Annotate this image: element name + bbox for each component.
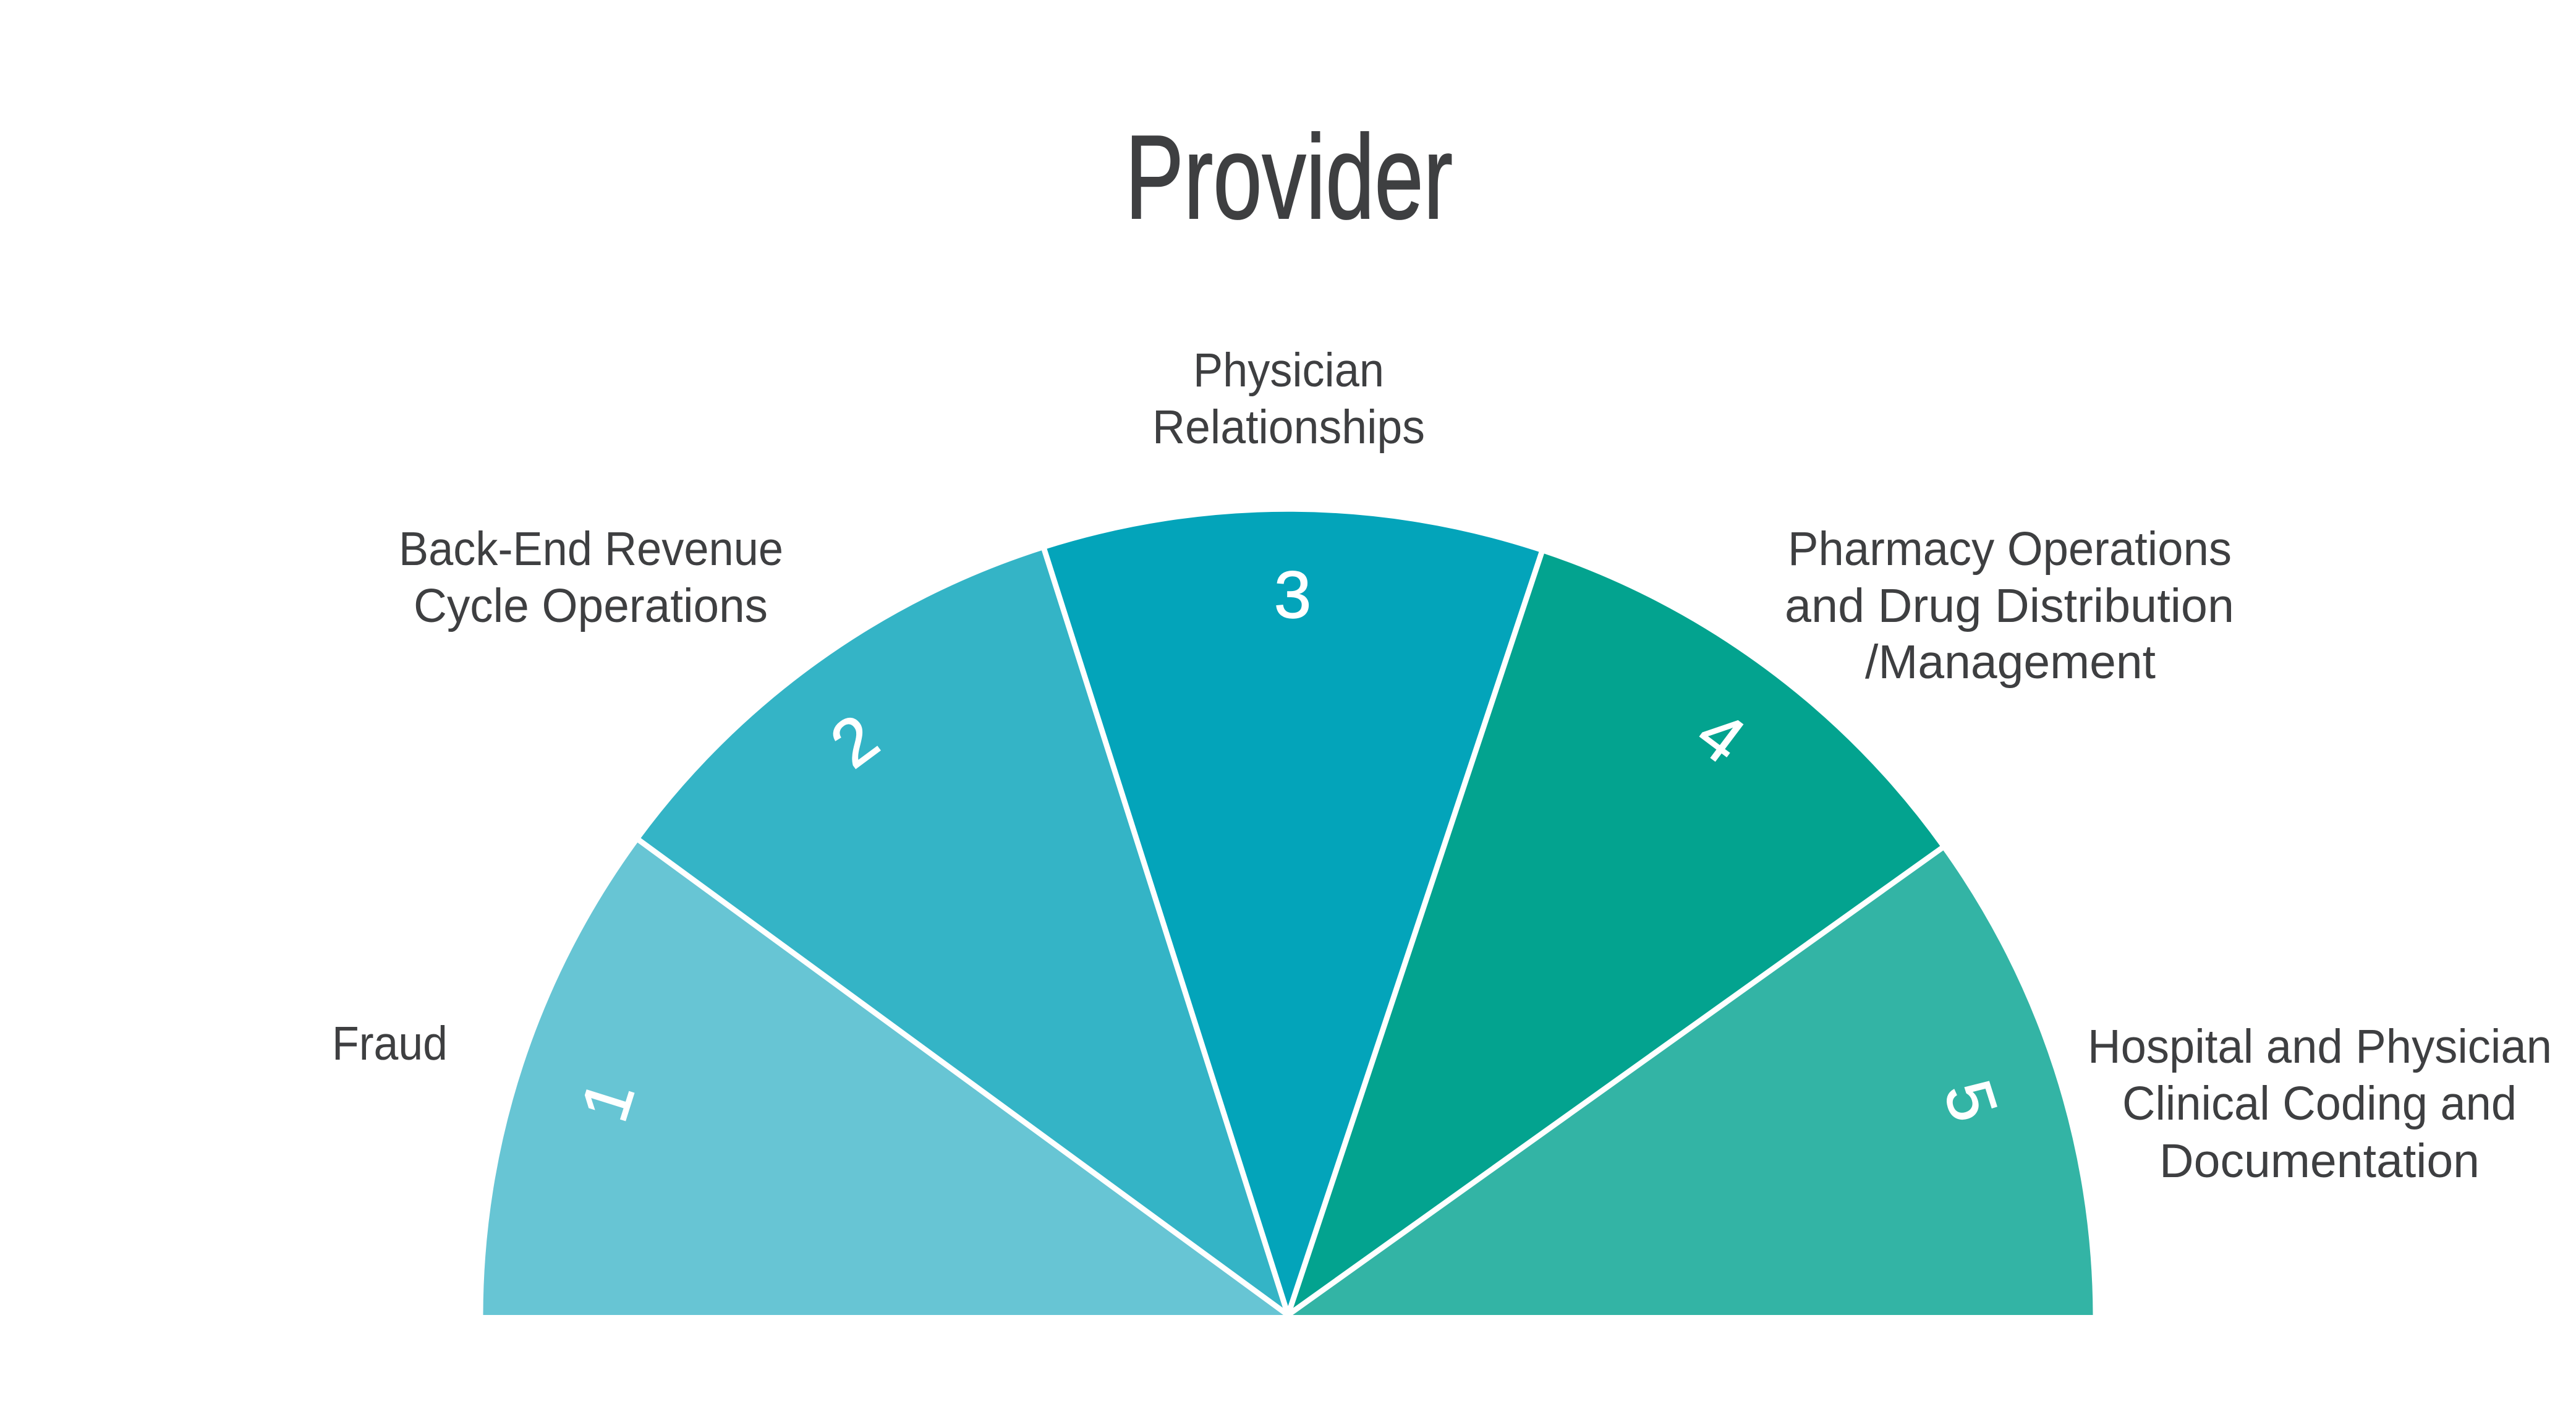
- title: Provider: [1125, 110, 1453, 244]
- label: Pharmacy Operations and Drug Distribution /Management: and Drug Distribution: [1785, 579, 2234, 632]
- label: Pharmacy Operations and Drug Distribution /Management: [1785, 522, 2234, 689]
- segment 5: [1288, 848, 2093, 1315]
- label: Hospital and Physician Clinical Coding and Documentation: Clinical Coding and: [2122, 1077, 2517, 1130]
- label: Pharmacy Operations and Drug Distribution /Management: Pharmacy Operations: [1788, 522, 2232, 576]
- label: Back-End Revenue Cycle Operations: [399, 522, 783, 632]
- number 4: 4: [1684, 696, 1758, 778]
- label: Hospital and Physician Clinical Coding and Documentation: Documentation: [2159, 1134, 2480, 1188]
- segment 3: [1044, 512, 1542, 1315]
- number 5: 5: [1930, 1072, 2012, 1130]
- number 3: 3: [1274, 557, 1311, 632]
- label: Hospital and Physician Clinical Coding and Documentation: Hospital and Physician: [2088, 1020, 2552, 1073]
- segment 4: [1288, 553, 1942, 1315]
- label: Back-End Revenue Cycle Operations: Back-End Revenue: [399, 522, 783, 576]
- label: Physician Relationships: Relationships: [1152, 401, 1425, 454]
- label: Pharmacy Operations and Drug Distribution /Management: /Management: [1865, 636, 2156, 689]
- number 1: 1: [566, 1072, 648, 1130]
- label: Physician Relationships: Physician: [1193, 344, 1384, 397]
- segment 1: [483, 840, 1288, 1315]
- semicircle gauge chart: [483, 512, 2093, 1315]
- label: Fraud: Fraud: [332, 1017, 448, 1070]
- number 2: 2: [817, 700, 891, 782]
- label: Back-End Revenue Cycle Operations: Cycle Operations: [414, 579, 768, 632]
- segment 2: [639, 550, 1288, 1315]
- label: Hospital and Physician Clinical Coding and Documentation: [2088, 1020, 2552, 1188]
- label: Physician Relationships: [1152, 344, 1425, 454]
